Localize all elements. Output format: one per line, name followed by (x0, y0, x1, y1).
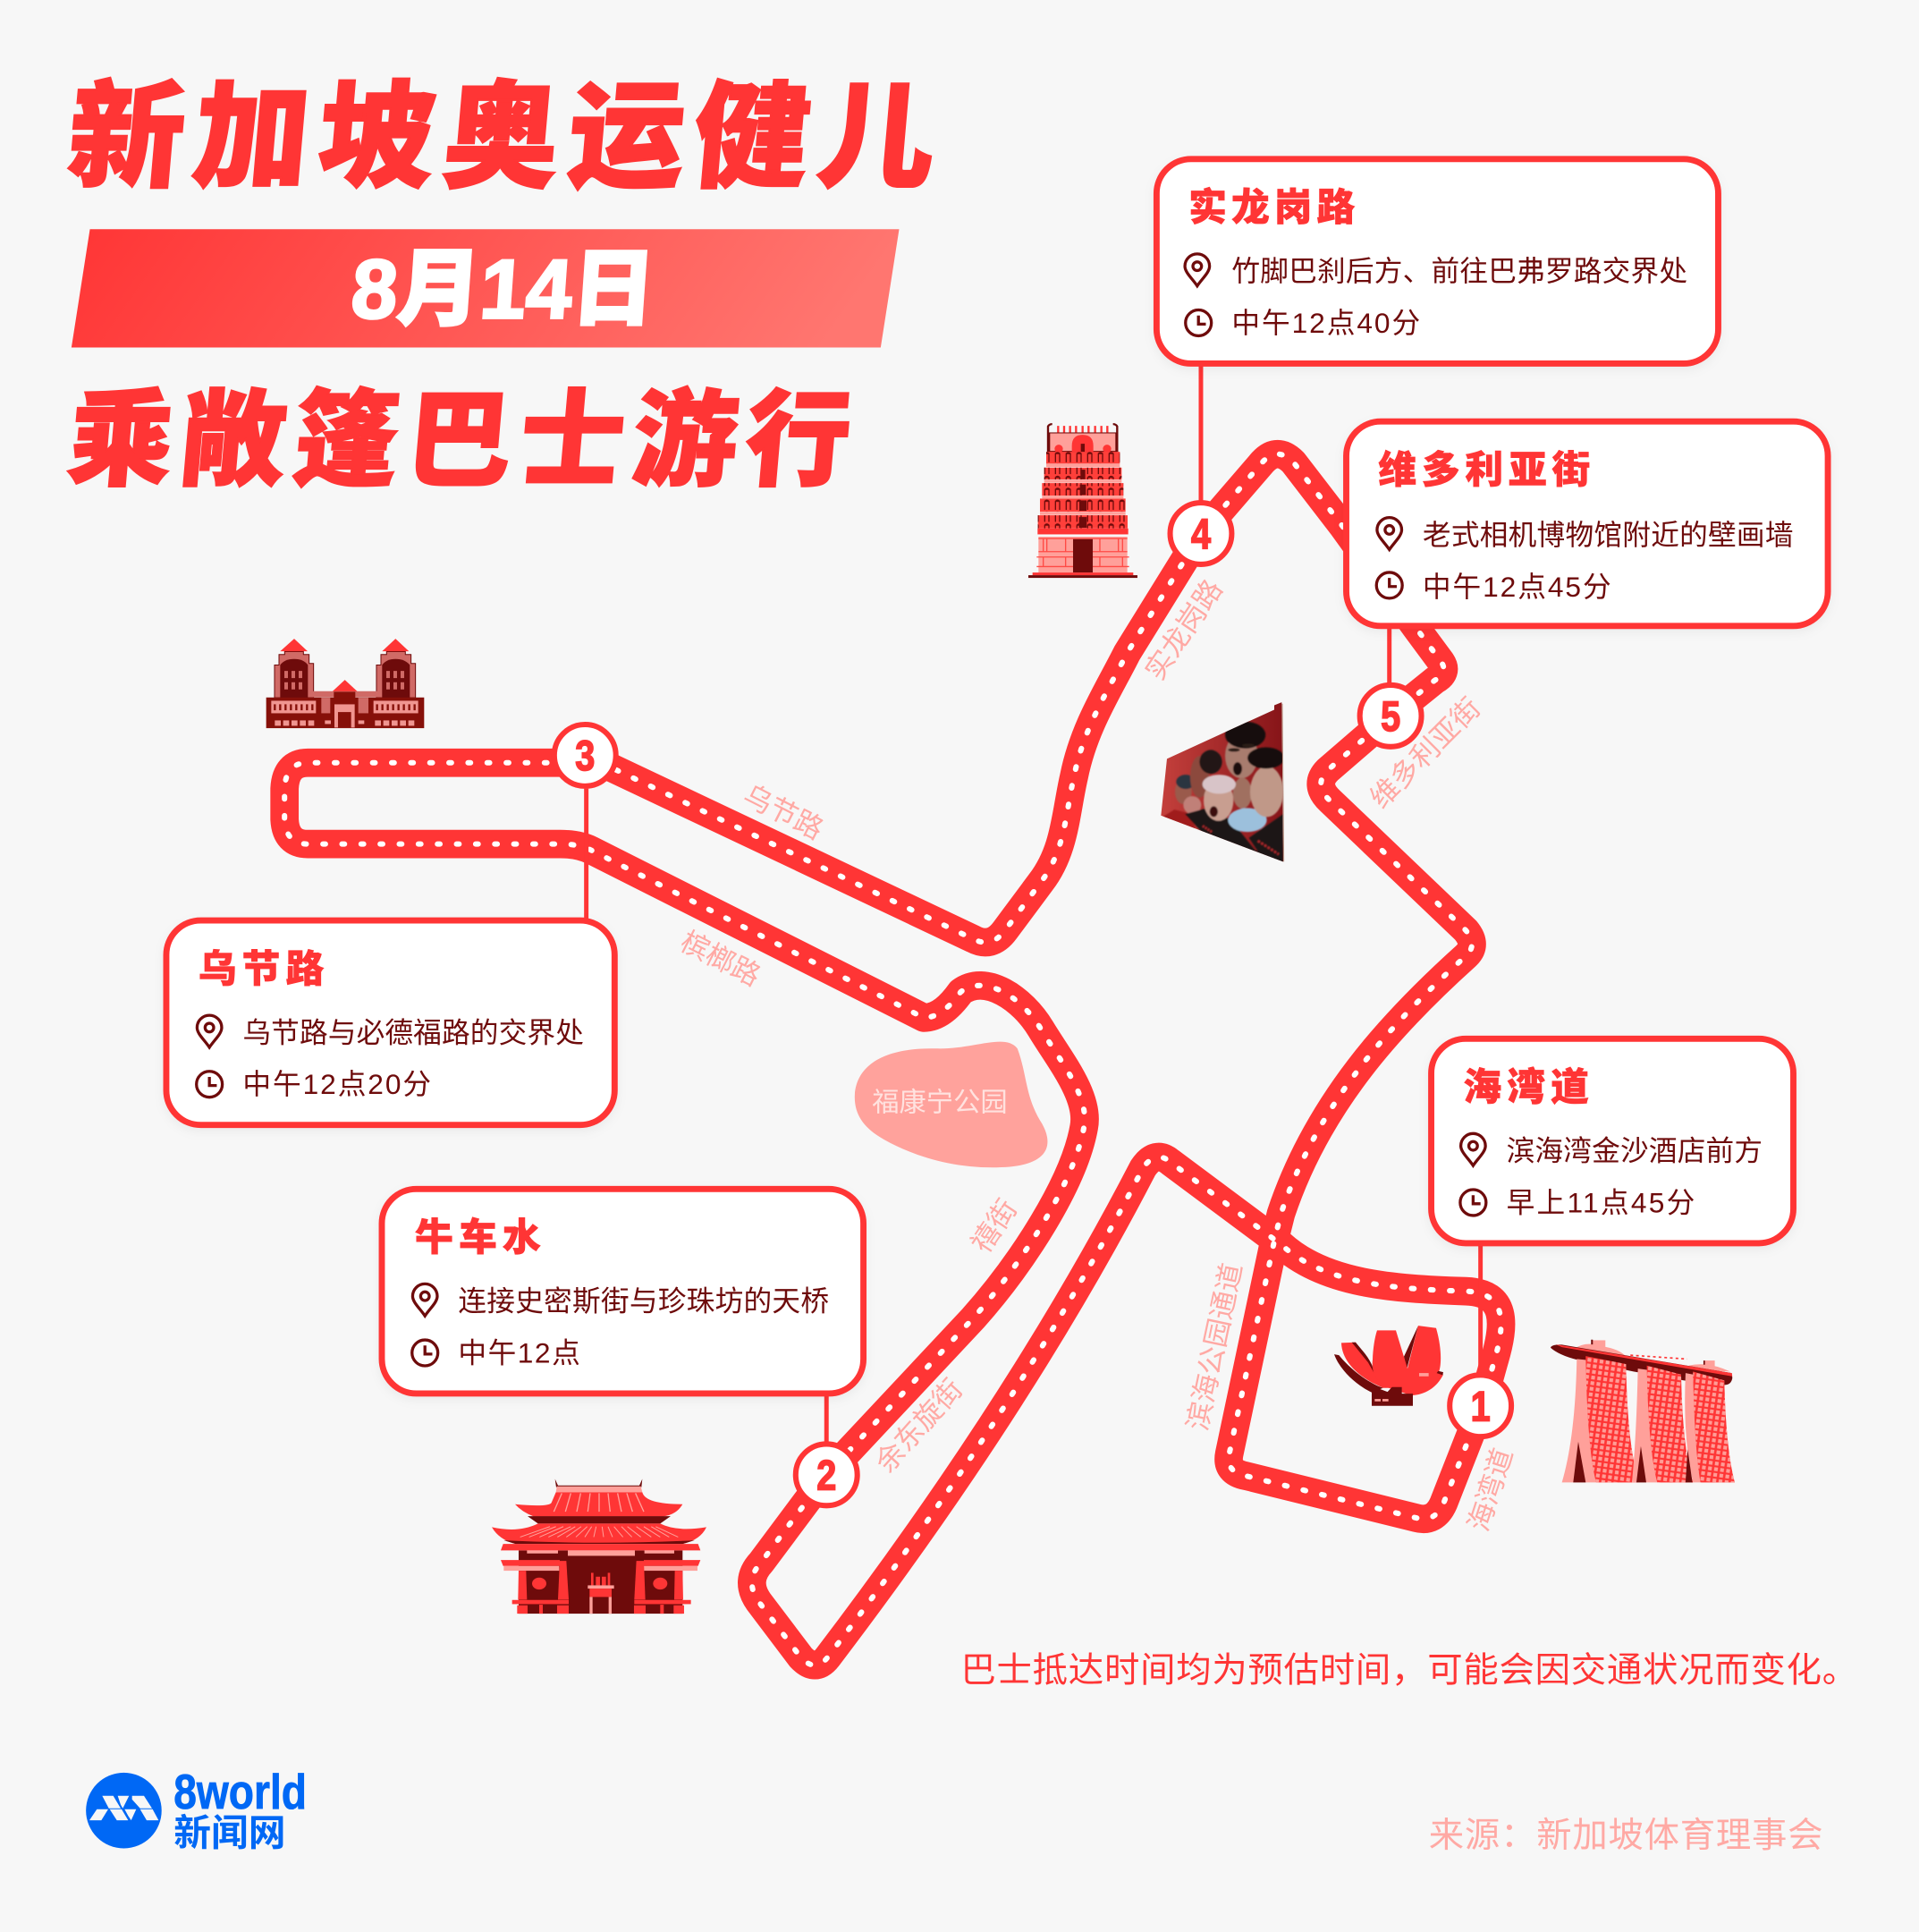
stop marker 1: 1 (1471, 1383, 1491, 1429)
heading: 海湾道 (1463, 1065, 1589, 1109)
road labels: 维多利亚街 (1364, 691, 1486, 814)
icon: pin (1461, 1133, 1485, 1165)
road labels: 禧街 (965, 1193, 1023, 1258)
icon: clock (1376, 572, 1402, 598)
stop marker 1 (1450, 1375, 1511, 1436)
road labels: 余东旋街 (869, 1373, 968, 1479)
panel: stop 4 (1156, 159, 1718, 363)
road labels: 乌节路 (739, 778, 829, 845)
park: Fort Canning: 福康宁公园 (872, 1088, 1008, 1118)
stop marker 3: 3 (575, 733, 595, 779)
heading: 牛车水 (415, 1216, 541, 1259)
source: 来源：新加坡体育理事会 (1429, 1816, 1823, 1855)
icon: Thian Hock Keng temple (492, 1479, 706, 1614)
icon: pin (1377, 518, 1401, 549)
icon: Marina Bay Sands (1551, 1340, 1735, 1482)
location: 乌节路与必德福路的交界处 (242, 1016, 584, 1048)
panel: stop 1 (1432, 1038, 1794, 1243)
date banner: 8月14日 (349, 242, 658, 335)
location: 滨海湾金沙酒店前方 (1507, 1135, 1763, 1167)
heading: 乌节路 (199, 948, 325, 991)
icon: mural (1161, 702, 1284, 865)
heading: 实龙岗路 (1188, 186, 1355, 230)
road labels (675, 573, 1518, 1535)
stop marker 2 (796, 1444, 858, 1505)
icon: Sri Thendayuthapani temple tower (1028, 424, 1137, 578)
icon: clock (1460, 1190, 1486, 1216)
connector lines (587, 363, 1481, 1448)
heading: 维多利亚街 (1378, 449, 1590, 492)
location: 竹脚巴刹后方、前往巴弗罗路交界处 (1231, 255, 1687, 287)
panel: stop 3 (166, 920, 614, 1125)
time: 早上11点45分 (1507, 1186, 1695, 1218)
stop marker 5: 5 (1381, 693, 1400, 740)
location: 连接史密斯街与珍珠坊的天桥 (458, 1285, 829, 1318)
title: line one: 新加坡奥运健儿 (63, 74, 940, 202)
icon: ArtScience Museum (1334, 1326, 1443, 1406)
road labels: 滨海公园通道 (1181, 1260, 1248, 1433)
road labels: 实龙岗路 (1138, 573, 1229, 686)
stop marker 2: 2 (816, 1452, 836, 1498)
panel: stop 2 (382, 1189, 864, 1394)
stop marker 4: 4 (1191, 511, 1211, 557)
title: line three: 乘敞篷巴士游行 (63, 382, 856, 499)
logo: 8world: 8world (173, 1764, 307, 1819)
time: 中午12点 (458, 1337, 580, 1369)
park: Fort Canning (855, 1042, 1047, 1167)
icon: Cathay building (266, 639, 424, 728)
icon: pin (1185, 254, 1210, 286)
logo: 8world: 新闻网 (173, 1812, 286, 1853)
stop marker 3 (554, 724, 616, 786)
icon: pin (412, 1284, 437, 1316)
time: 中午12点20分 (242, 1068, 431, 1100)
logo: 8world (86, 1764, 307, 1853)
panel: stop 5 (1347, 421, 1828, 626)
icon: clock (197, 1072, 223, 1097)
time: 中午12点40分 (1231, 307, 1420, 339)
stop marker 5 (1360, 685, 1422, 747)
icon: pin (197, 1015, 222, 1047)
bus route (284, 454, 1501, 1665)
stop marker 4 (1171, 503, 1231, 564)
icon: clock (1186, 310, 1212, 335)
icon: clock (412, 1340, 438, 1366)
road labels: 槟榔路 (675, 925, 765, 992)
location: 老式相机博物馆附近的壁画墙 (1423, 519, 1794, 551)
date banner (72, 229, 900, 348)
time: 中午12点45分 (1423, 571, 1611, 603)
road labels: 海湾道 (1462, 1445, 1518, 1535)
note: 巴士抵达时间均为预估时间，可能会因交通状况而变化。 (960, 1650, 1857, 1690)
